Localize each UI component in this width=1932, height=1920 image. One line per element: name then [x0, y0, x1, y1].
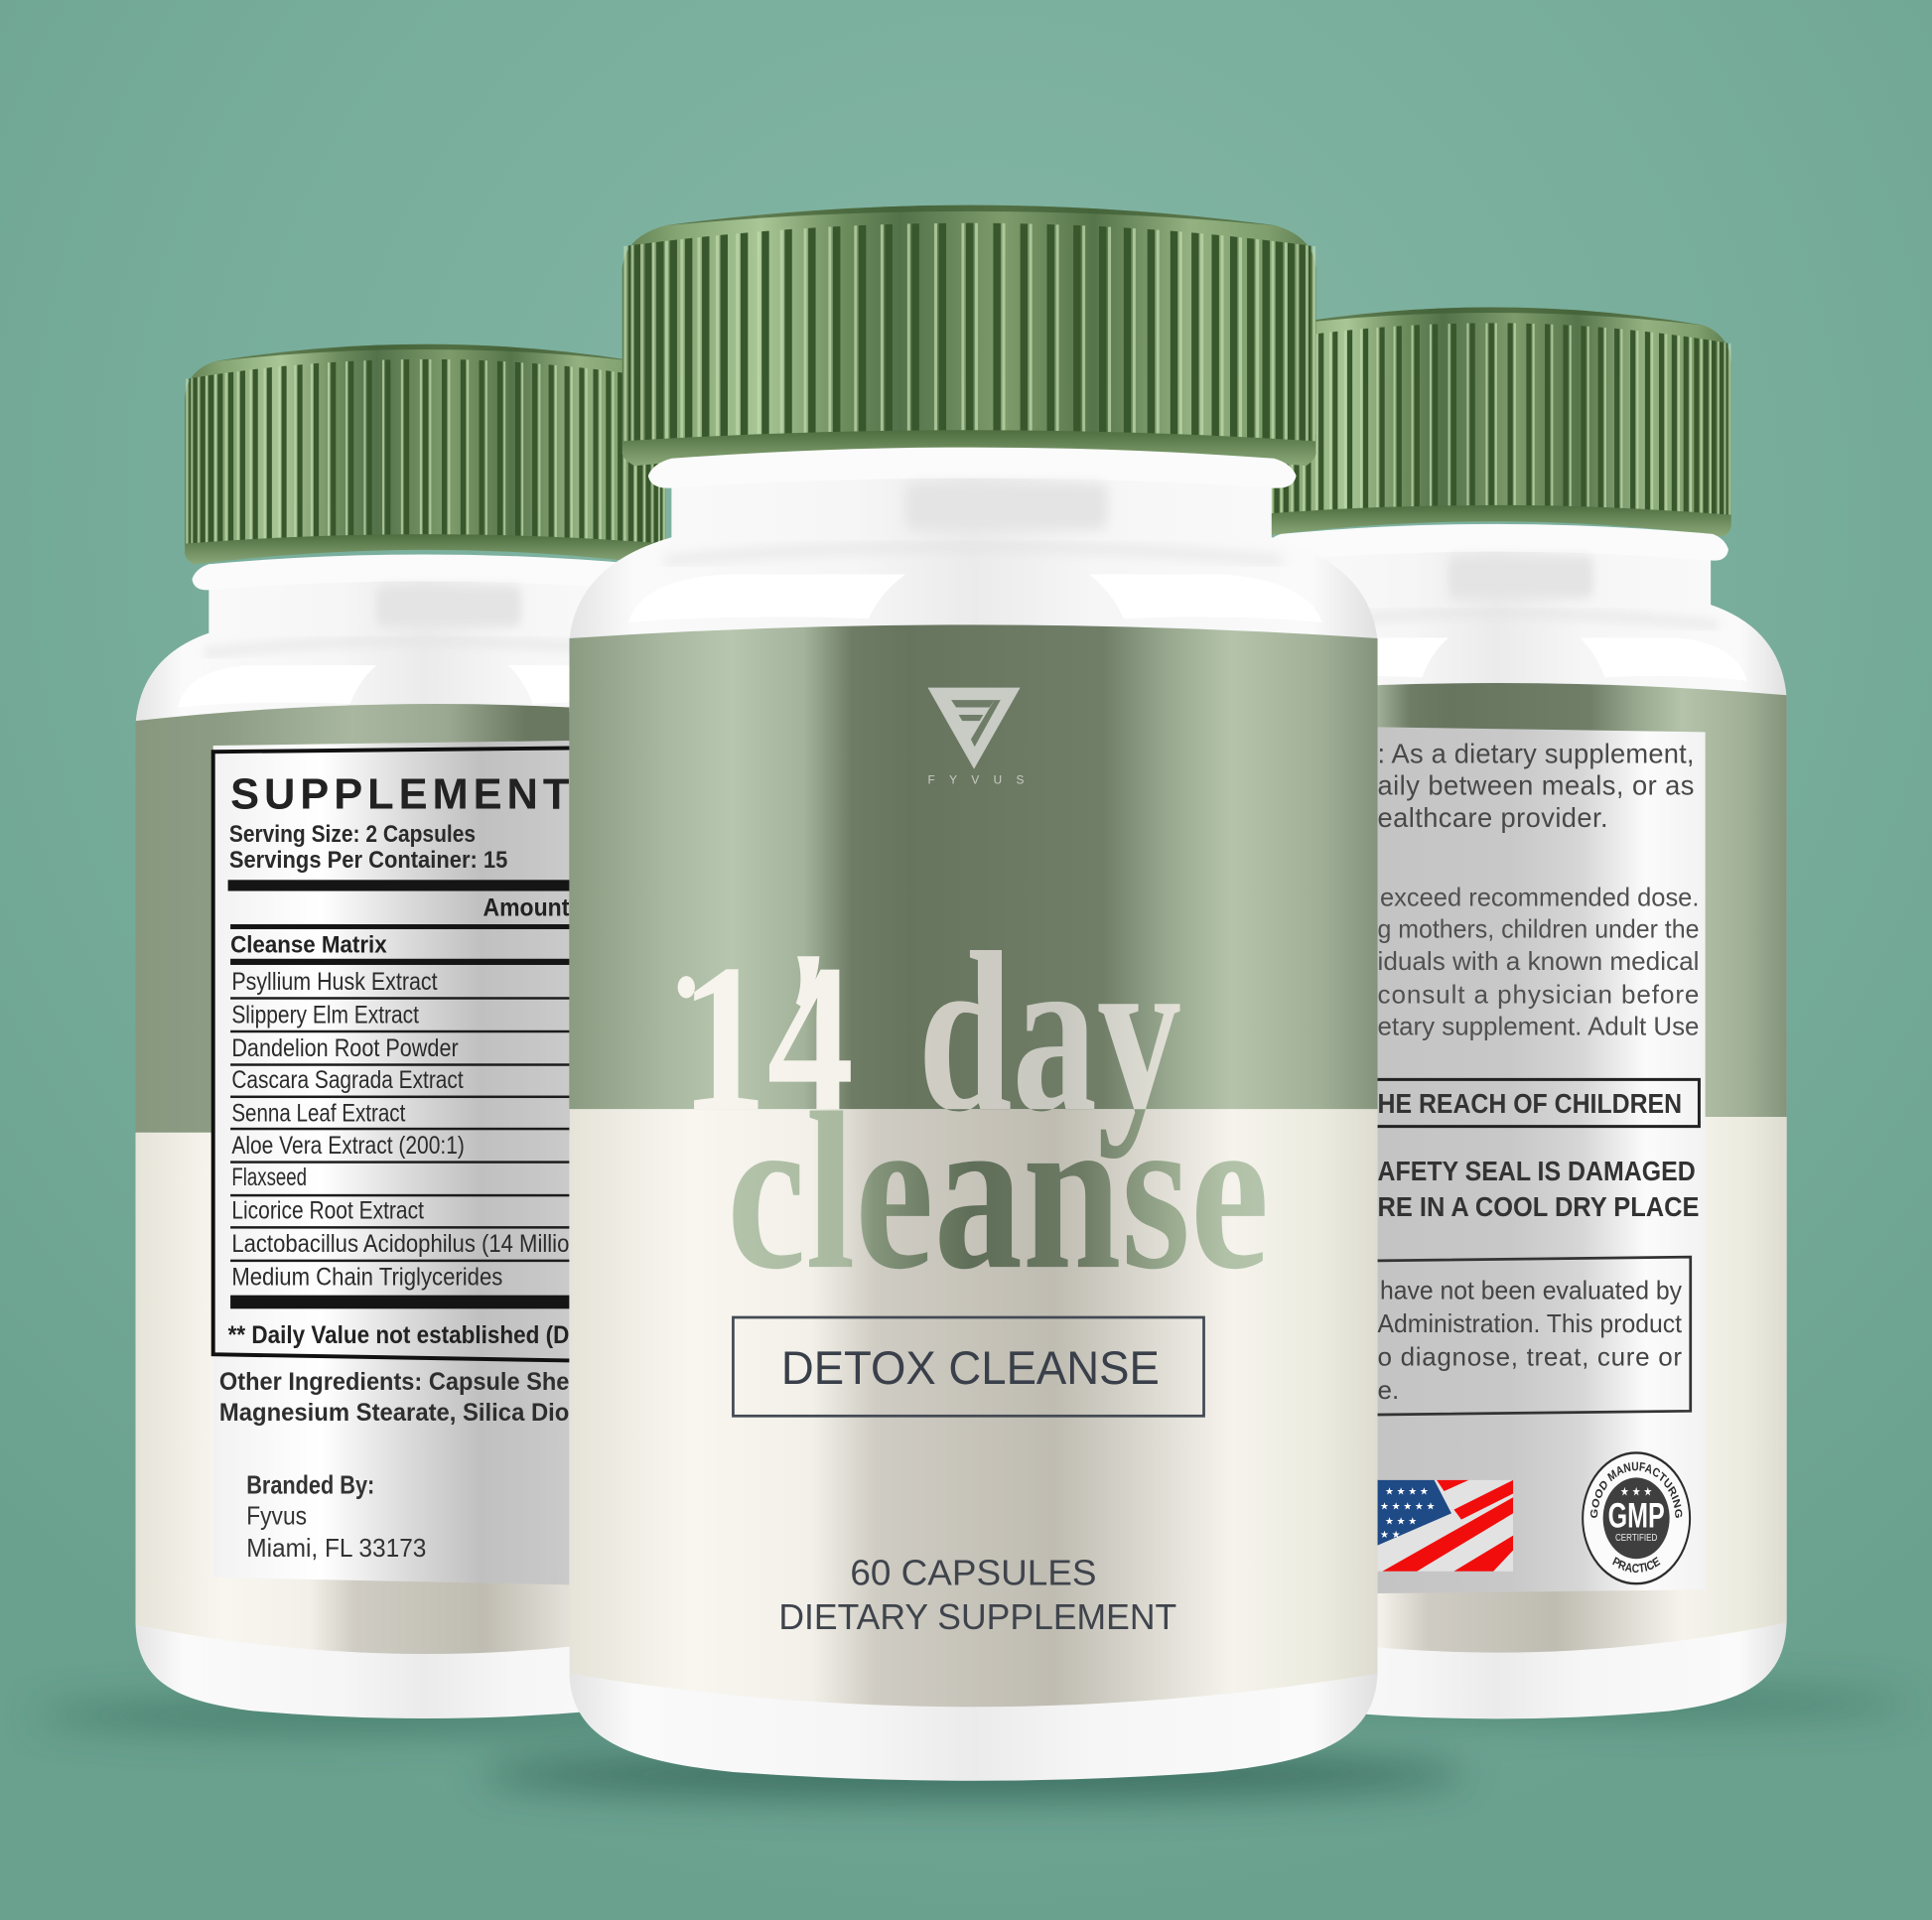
icon: american flag: ★ ★ ★: [1385, 1517, 1417, 1528]
icon: Fyvus logo: FYVUS: [928, 773, 1024, 786]
amount column heading: Amount: [483, 894, 569, 921]
other ingredients: [219, 1369, 569, 1427]
blend heading: Cleanse Matrix: [230, 932, 387, 959]
caution text: consult a physician before: [1378, 979, 1699, 1009]
capsule count and supplement line: DIETARY SUPPLEMENT: [778, 1596, 1176, 1637]
FDA disclaimer box: [1378, 1257, 1691, 1415]
ingredient rows: Flaxseed: [231, 1165, 307, 1191]
caution text: iduals with a known medical: [1378, 946, 1699, 976]
directions text: [1378, 738, 1694, 833]
left bottle (supplement facts): [136, 338, 715, 1718]
icon: american flag: [1378, 1480, 1513, 1572]
title: 14 day: [677, 950, 1179, 1159]
supplement facts label: [213, 741, 570, 1584]
product type box: DETOX CLEANSE: [781, 1341, 1160, 1394]
facts box outline: [213, 748, 569, 1360]
caution text: exceed recommended dose.: [1380, 882, 1699, 911]
directions and warnings label: [1378, 727, 1706, 1593]
directions text: ealthcare provider.: [1378, 802, 1608, 833]
caution text: [1378, 882, 1699, 1041]
capsule count and supplement line: 60 CAPSULES: [850, 1552, 1097, 1592]
brand address: Fyvus: [246, 1501, 307, 1531]
right bottle body: [1207, 524, 1787, 1718]
icon: american flag: ★ ★: [1380, 1530, 1401, 1541]
icon: GMP certified badge: CERTIFIED: [1615, 1532, 1658, 1543]
icon: GMP certified badge: PRACTICE: [1612, 1557, 1660, 1573]
serving info: Serving Size: 2 Capsules: [229, 821, 476, 847]
left bottle body: [136, 554, 715, 1718]
center bottle (front): [569, 198, 1378, 1781]
directions text: aily between meals, or as: [1378, 770, 1694, 801]
icon: american flag: ★ ★ ★ ★ ★: [1380, 1502, 1436, 1513]
center bottle body and label bands: [569, 448, 1378, 1781]
FDA disclaimer box: e.: [1378, 1375, 1399, 1405]
capsule count and supplement line: [778, 1552, 1176, 1637]
storage warning: AFETY SEAL IS DAMAGED: [1378, 1156, 1696, 1186]
keep out of reach box: HE REACH OF CHILDREN: [1378, 1088, 1682, 1119]
ingredient rows: Slippery Elm Extract: [231, 1002, 419, 1029]
ingredient rows: Aloe Vera Extract (200:1): [231, 1133, 465, 1160]
facts heading: SUPPLEMENT: [230, 770, 570, 818]
storage warning: [1378, 1156, 1699, 1222]
ingredient rows: Dandelion Root Powder: [231, 1035, 459, 1062]
caution text: g mothers, children under the: [1378, 914, 1699, 944]
brand address: [246, 1469, 426, 1563]
brand address: Branded By:: [246, 1469, 374, 1499]
FDA disclaimer box: o diagnose, treat, cure or: [1378, 1341, 1682, 1371]
ingredient rows: Psyllium Husk Extract: [231, 969, 438, 996]
title: 14 day: day: [918, 904, 1181, 1159]
caution text: etary supplement. Adult Use: [1378, 1012, 1699, 1041]
directions text: : As a dietary supplement,: [1378, 738, 1694, 768]
icon: Fyvus logo: [928, 688, 1024, 786]
ingredient rows: Lactobacillus Acidophilus (14 Millio: [231, 1231, 569, 1258]
right bottle (directions and warnings): [1237, 308, 1787, 1745]
ingredient rows: Cascara Sagrada Extract: [231, 1067, 464, 1094]
other ingredients: Other Ingredients: Capsule She: [219, 1369, 569, 1396]
ingredient rows: Medium Chain Triglycerides: [231, 1265, 502, 1292]
left label band tone: [136, 704, 569, 1133]
icon: GMP certified badge: GOOD MANUFACTURING: [1590, 1461, 1682, 1518]
title: cleanse: cleanse: [727, 1067, 1269, 1316]
title: 14 day: 14: [680, 921, 854, 1156]
product type box: [733, 1317, 1204, 1416]
serving info: Servings Per Container: 15: [229, 847, 507, 873]
ingredient rows: Senna Leaf Extract: [231, 1101, 405, 1128]
floor shadows: [37, 1689, 1910, 1799]
other ingredients: Magnesium Stearate, Silica Dio: [219, 1400, 569, 1427]
title: 14 day: day: [918, 904, 1181, 1159]
ingredient rows: Licorice Root Extract: [231, 1198, 424, 1225]
keep out of reach box: [1378, 1079, 1699, 1127]
icon: GMP certified badge: GMP: [1608, 1496, 1665, 1535]
FDA disclaimer box: have not been evaluated by: [1380, 1275, 1682, 1304]
right bottle cap: [1251, 300, 1731, 539]
daily value note: ** Daily Value not established (D: [228, 1322, 569, 1349]
FDA disclaimer box: Administration. This product: [1378, 1308, 1683, 1338]
icon: GMP certified badge: ★ ★ ★: [1620, 1486, 1652, 1499]
storage warning: RE IN A COOL DRY PLACE: [1378, 1191, 1699, 1222]
serving info: [229, 821, 507, 873]
icon: american flag: ★ ★ ★ ★: [1385, 1487, 1429, 1498]
divider bars: [228, 880, 569, 1308]
brand address: Miami, FL 33173: [246, 1533, 426, 1563]
icon: GMP certified badge: [1582, 1451, 1692, 1584]
left bottle cap: [185, 338, 665, 567]
ingredient rows: [231, 969, 569, 1292]
center bottle cap: [622, 198, 1316, 469]
